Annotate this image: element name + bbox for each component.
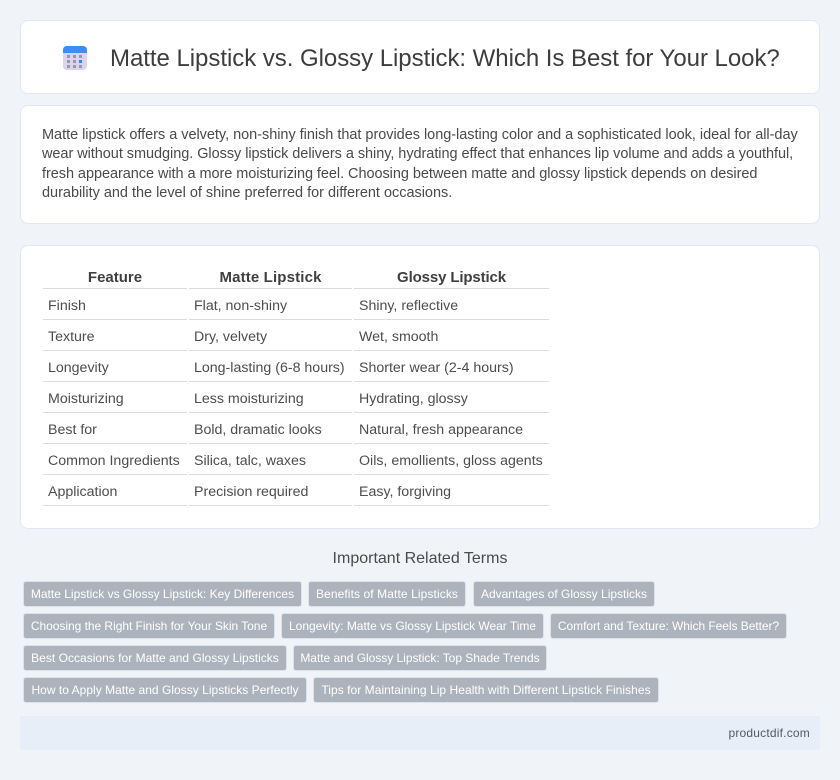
comparison table: Common Ingredients	[48, 453, 180, 469]
related terms tags: Matte Lipstick vs Glossy Lipstick: Key Differences	[31, 587, 294, 601]
intro paragraph: wear without smudging. Glossy lipstick delivers a shiny, hydrating effect that enhances lip volume and adds a youthful,	[42, 146, 793, 162]
comparison table: Moisturizing	[48, 391, 124, 407]
comparison table: Easy, forgiving	[359, 484, 451, 500]
related terms tags: Best Occasions for Matte and Glossy Lipsticks	[31, 651, 279, 665]
comparison table: Hydrating, glossy	[359, 391, 468, 407]
intro paragraph	[42, 127, 798, 201]
comparison table: Matte Lipstick	[219, 269, 322, 286]
comparison table: Less moisturizing	[194, 391, 304, 407]
comparison table: Shorter wear (2-4 hours)	[359, 360, 514, 376]
related terms tags	[23, 581, 787, 703]
intro paragraph: durability and the level of shine preferred for different occasions.	[42, 185, 452, 201]
comparison table: Finish	[48, 298, 86, 314]
comparison table: Silica, talc, waxes	[194, 453, 306, 469]
comparison table: Bold, dramatic looks	[194, 422, 322, 438]
comparison table: Precision required	[194, 484, 308, 500]
comparison table: Long-lasting (6-8 hours)	[194, 360, 345, 376]
comparison table: Natural, fresh appearance	[359, 422, 523, 438]
comparison table: Oils, emollients, gloss agents	[359, 453, 543, 469]
intro paragraph: fresh appearance with a more moisturizing feel. Choosing between matte and glossy lipstick depends on desired	[42, 166, 757, 182]
intro paragraph: Matte lipstick offers a velvety, non-shiny finish that provides long-lasting color and a sophisticated look, ideal for all-day	[42, 127, 798, 143]
comparison table: Glossy Lipstick	[397, 269, 506, 286]
intro text panel	[20, 105, 820, 224]
comparison table: Dry, velvety	[194, 329, 267, 345]
comparison table: Wet, smooth	[359, 329, 438, 345]
comparison table: Texture	[48, 329, 95, 345]
related terms tags: Matte and Glossy Lipstick: Top Shade Trends	[300, 651, 540, 665]
footer bar	[20, 716, 820, 750]
comparison table: Flat, non-shiny	[194, 298, 287, 314]
comparison table	[43, 269, 549, 506]
header panel	[20, 20, 820, 94]
comparison table: Application	[48, 484, 117, 500]
comparison table: Longevity	[48, 360, 109, 376]
comparison table: Best for	[48, 422, 97, 438]
comparison table panel	[20, 245, 820, 529]
comparison table: Shiny, reflective	[359, 298, 458, 314]
related terms tags: Tips for Maintaining Lip Health with Different Lipstick Finishes	[321, 683, 651, 697]
related terms tags: Comfort and Texture: Which Feels Better?	[558, 619, 779, 633]
related terms tags: Benefits of Matte Lipsticks	[316, 587, 458, 601]
related terms tags: How to Apply Matte and Glossy Lipsticks Perfectly	[31, 683, 299, 697]
related terms tags: Longevity: Matte vs Glossy Lipstick Wear Time	[289, 619, 536, 633]
footer source label: productdif.com	[728, 726, 810, 740]
related terms tags: Advantages of Glossy Lipsticks	[481, 587, 647, 601]
related terms heading: Important Related Terms	[333, 550, 507, 567]
title: Matte Lipstick vs. Glossy Lipstick: Which Is Best for Your Look?	[110, 45, 780, 72]
comparison table: Feature	[88, 269, 142, 286]
related terms tags: Choosing the Right Finish for Your Skin Tone	[31, 619, 267, 633]
icon: calendar	[63, 46, 87, 70]
